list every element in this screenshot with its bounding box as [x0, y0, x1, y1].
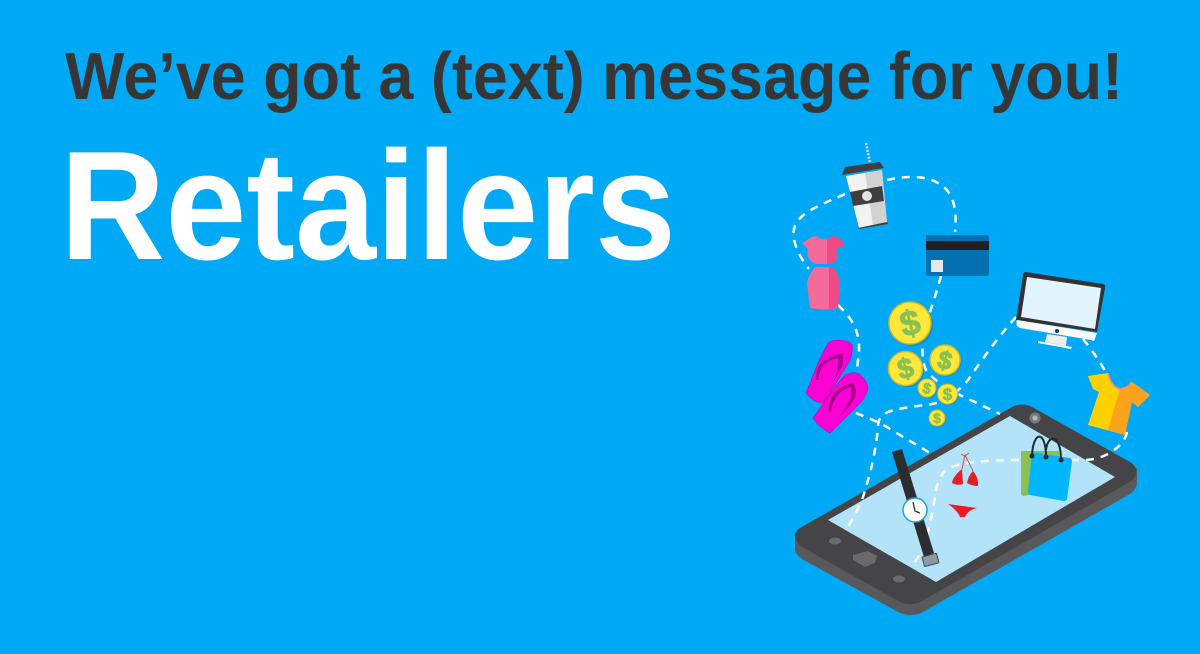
- icon: t-shirt: [1088, 373, 1150, 435]
- icon: wristwatch: [892, 449, 939, 567]
- icon: dollar coins: $: [921, 380, 933, 398]
- icon: dollar coins: $: [896, 302, 924, 345]
- icon: dress: [802, 236, 845, 310]
- icon: dollar coins: $: [894, 351, 917, 385]
- title: We’ve got a (text) message for you!: [65, 39, 1123, 114]
- icon: dollar coins: $: [943, 385, 953, 404]
- icon: phone: [795, 404, 1137, 615]
- dashed route lines: [794, 177, 1127, 568]
- heading: Retailers: Retailers: [60, 119, 676, 292]
- icon: computer monitor: [1016, 272, 1105, 349]
- icon: dollar coins: $: [933, 410, 941, 426]
- icon: dollar coins: $: [935, 346, 955, 376]
- phone screen: [828, 416, 1115, 582]
- icon: dollar coins: [888, 302, 962, 427]
- icon: shopping bags: [1021, 437, 1072, 501]
- icon: flip flops: [806, 340, 868, 433]
- icon: coffee cup: [842, 143, 888, 229]
- icon: credit card: [926, 235, 989, 276]
- icon: bikini: [948, 453, 978, 517]
